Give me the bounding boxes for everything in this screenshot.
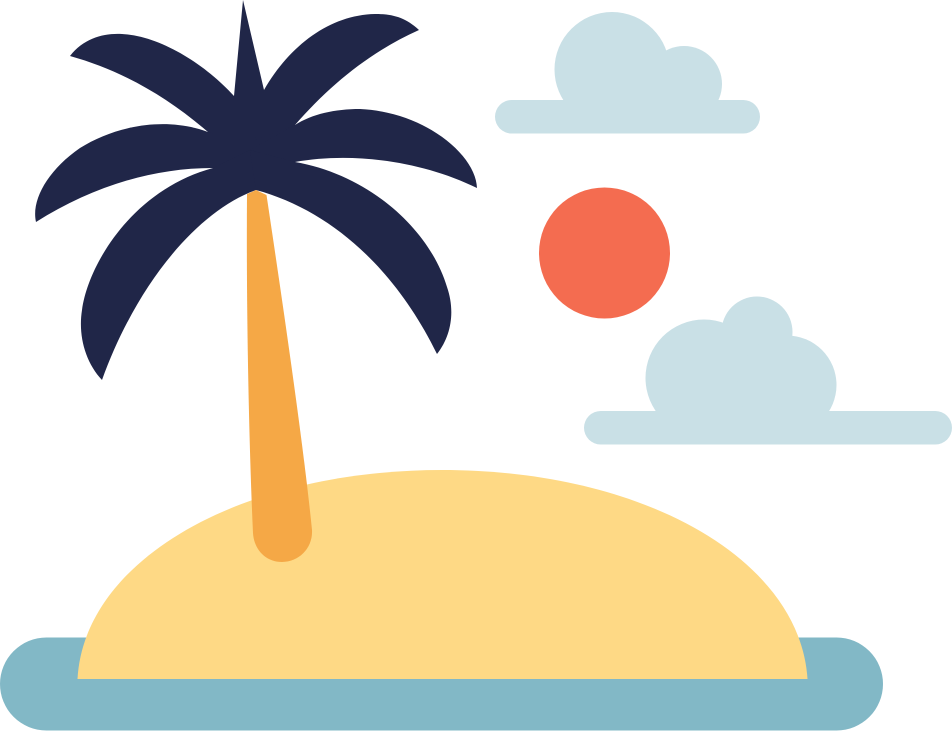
leaf: top spike and crown <box>208 0 295 190</box>
water <box>0 638 883 730</box>
palm trunk <box>247 190 312 562</box>
leaf: middle left <box>35 124 250 222</box>
leaf: lower left <box>81 150 256 380</box>
leaf: lower right <box>250 150 451 354</box>
icon: lower cloud <box>584 296 952 444</box>
icon: sun <box>539 188 670 318</box>
leaf: middle right <box>250 109 477 188</box>
leaf: upper left <box>70 34 240 140</box>
leaf: upper right <box>255 14 419 140</box>
icon: upper cloud <box>495 12 760 134</box>
palm leaves <box>35 0 477 380</box>
island sand <box>78 470 808 679</box>
